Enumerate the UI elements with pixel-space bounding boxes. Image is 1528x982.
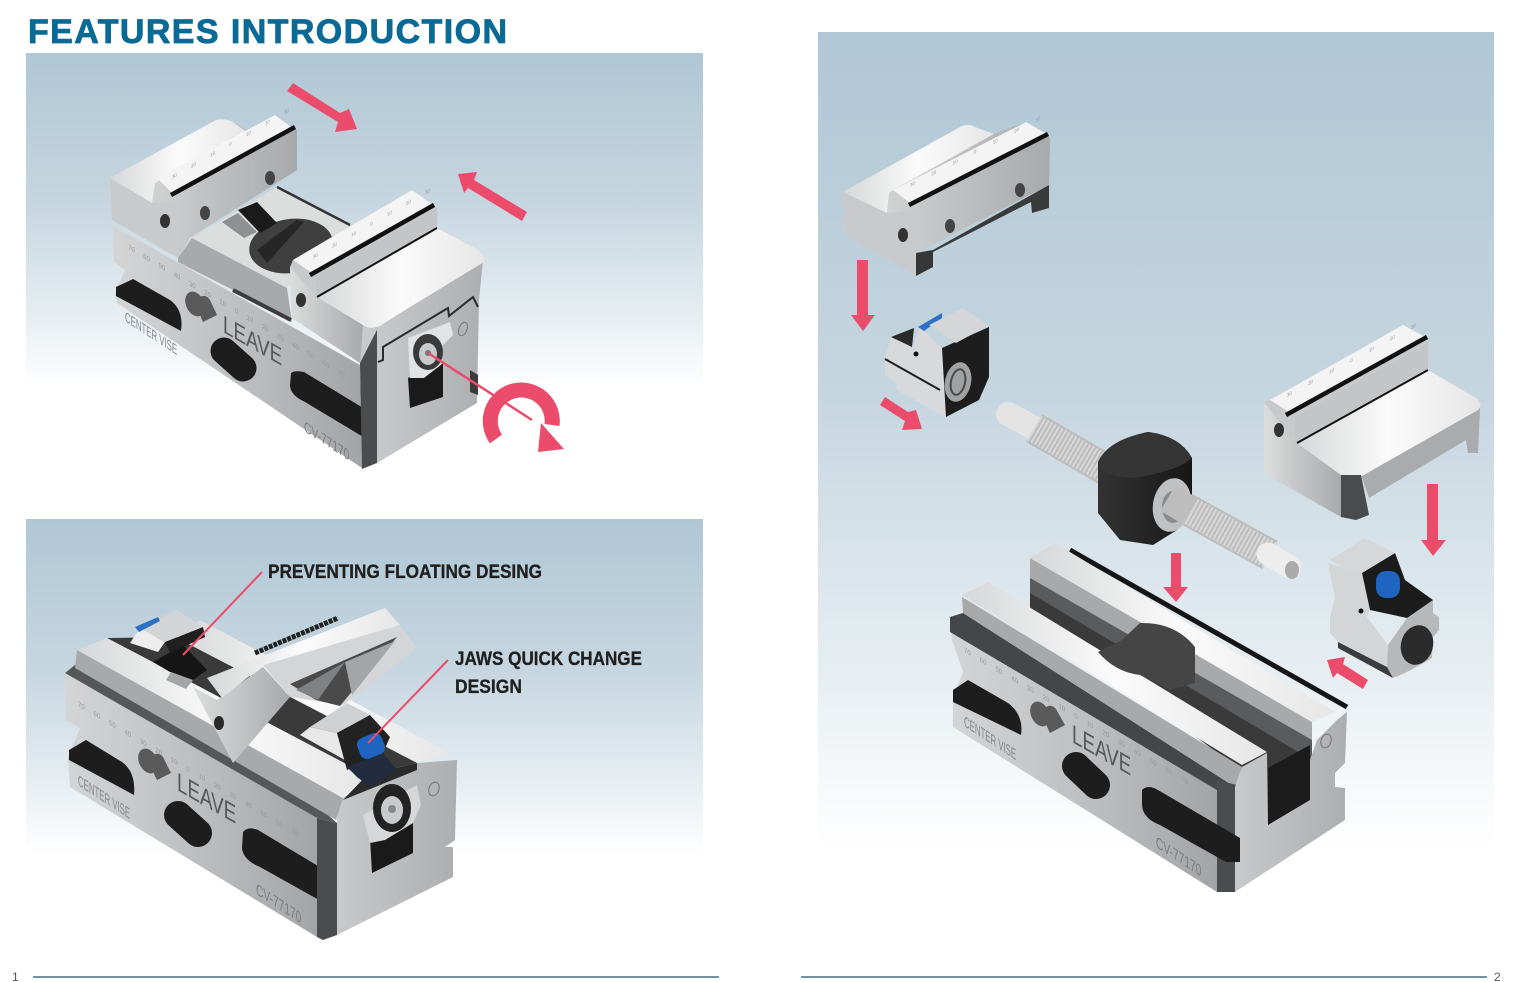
brand logo <box>1026 698 1065 733</box>
panel: top left background <box>26 53 703 388</box>
exploded view <box>843 116 1481 892</box>
engraved scale: 70 60 50 40 30 20 10 0 10 20 30 40 50 60 70 <box>128 244 345 379</box>
end face <box>337 760 457 935</box>
base slots <box>69 740 338 905</box>
panel: right background <box>818 32 1494 847</box>
moving jaw part <box>843 116 1050 276</box>
left rail side <box>962 597 1242 787</box>
engraved model text: CENTER VISE <box>125 308 177 358</box>
bolt plate <box>363 785 421 843</box>
label: jaws quick change <box>455 649 642 698</box>
bolt plate <box>408 322 453 378</box>
brand name: LEAVE <box>1072 718 1131 782</box>
vise: closed assembly with movement arrows <box>110 83 564 469</box>
screw exit shaft <box>1168 498 1190 511</box>
pointer line to blue button <box>368 660 448 743</box>
rail: front top and chamfer <box>65 638 367 823</box>
nut cut-out <box>246 213 336 279</box>
fixed jaw part <box>1264 323 1481 520</box>
moving jaw <box>110 108 297 258</box>
rectangular opening <box>370 818 413 873</box>
arrow: fixed jaw down <box>1421 484 1446 556</box>
screw slot <box>238 202 277 233</box>
label: jaws quick change: DESIGN <box>455 677 522 698</box>
dark corner <box>317 818 337 940</box>
main front face <box>950 625 1217 892</box>
centre cut-out <box>1098 623 1195 690</box>
channel interior <box>1030 578 1312 825</box>
right rail top <box>1030 543 1335 722</box>
lead screw <box>1008 414 1290 567</box>
label: jaws quick change: JAWS QUICK CHANGE <box>455 649 642 670</box>
arrow: rotation <box>490 390 564 452</box>
base front face <box>65 673 317 937</box>
brand name: LEAVE <box>177 766 236 830</box>
right jaw nut <box>300 703 397 787</box>
channel dark floor <box>107 637 417 775</box>
bed front dark line <box>233 290 291 320</box>
hexagon mark <box>457 321 469 337</box>
moving jaw: 30 20 10 0 10 20 30 <box>172 108 289 181</box>
engraved model text: CENTER VISE <box>78 772 130 823</box>
bed side chamfer <box>178 238 292 322</box>
right nut <box>1328 538 1439 678</box>
engraved model number: CV-77170 <box>304 418 349 465</box>
title: FEATURES INTRODUCTION <box>28 13 507 51</box>
end face <box>377 260 483 463</box>
end face outline step <box>378 297 478 362</box>
left nut <box>885 308 989 417</box>
tilted jaw <box>193 608 417 763</box>
dark corner <box>360 327 377 469</box>
fixed jaw <box>290 188 484 363</box>
slots <box>953 680 1240 862</box>
arrow: push in from front <box>458 172 527 221</box>
right rail lower step <box>1030 578 1312 760</box>
right rail side <box>1030 558 1312 740</box>
saddle <box>257 220 304 263</box>
arrow: right nut slide <box>1327 657 1368 689</box>
rail: back top <box>175 620 450 763</box>
engraved scale: 70 60 50 40 30 20 10 0 10 20 30 40 50 60 70 <box>78 701 298 839</box>
bottom side notch <box>470 370 478 395</box>
pointer line to anti-lift feature <box>183 572 262 655</box>
end face <box>1235 712 1347 892</box>
engraved model number: CV-77170 <box>1156 833 1201 881</box>
engraved model text: CENTER VISE <box>964 713 1016 764</box>
bed back edge <box>277 187 350 225</box>
dark strip under rail <box>950 613 1238 800</box>
centre bed <box>192 187 350 288</box>
vise: jaw tilted for quick change <box>65 572 457 940</box>
base front face <box>113 226 362 468</box>
base slots <box>116 279 378 441</box>
hex bolt <box>373 784 411 832</box>
dark corner <box>1217 780 1237 892</box>
arrow: jaw down onto nut <box>851 260 875 331</box>
channel end opening <box>343 763 417 800</box>
label: preventing floating: PREVENTING FLOATING DESING <box>268 562 542 583</box>
hexagon mark <box>427 781 441 797</box>
panel: bottom left background <box>26 519 703 854</box>
engraved scale: 70 60 50 40 30 20 10 0 10 20 30 40 50 60 70 <box>964 647 1188 787</box>
fixed jaw part: 30 20 10 0 10 20 30 <box>1287 323 1416 399</box>
brand logo <box>134 745 171 780</box>
rectangular opening <box>408 362 443 408</box>
brand logo <box>181 288 217 322</box>
nut block <box>1098 432 1195 545</box>
moving jaw part: 30 20 10 0 10 20 30 <box>910 116 1041 189</box>
arrow: push in from back <box>287 83 357 132</box>
brand name: LEAVE <box>223 310 282 372</box>
arrow: block down <box>1163 553 1188 602</box>
screw tip socket <box>1285 561 1299 579</box>
vise body <box>950 543 1347 892</box>
left rail top <box>962 582 1267 765</box>
fixed jaw: 30 20 10 0 10 20 30 <box>313 188 430 261</box>
arrow: left nut slide <box>880 397 922 430</box>
left jaw nut <box>130 610 207 689</box>
opening dark <box>1268 745 1310 825</box>
screw thread <box>222 213 257 238</box>
hexagon mark <box>1319 733 1333 749</box>
pointer line to bolt <box>428 353 532 420</box>
black back edge <box>1070 550 1347 707</box>
hex bolt <box>413 334 443 370</box>
engraved model number: CV-77170 <box>256 880 301 928</box>
